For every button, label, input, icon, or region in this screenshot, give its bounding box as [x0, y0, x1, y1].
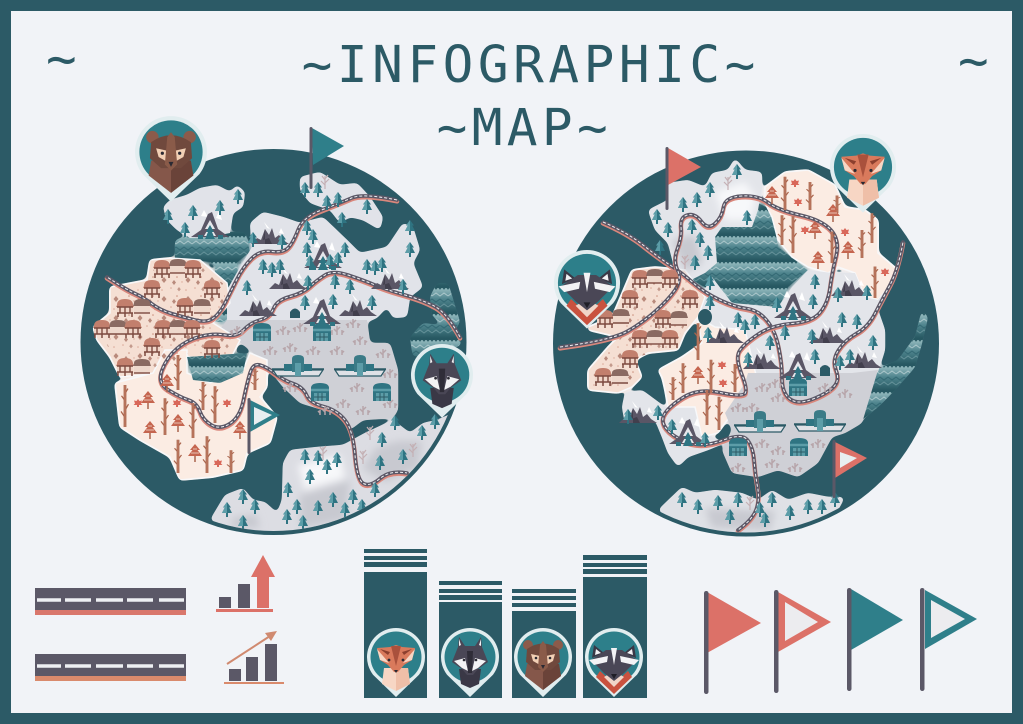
bar chart: [364, 549, 647, 698]
panel: left map: [80, 116, 473, 540]
flag legend: teal solid: [847, 588, 903, 691]
road ribbons right: [560, 196, 903, 531]
growth chart with big arrow: [216, 555, 275, 612]
village speckle: [104, 268, 231, 368]
pine trees left: [163, 175, 440, 530]
road sample 2: [35, 654, 186, 681]
flag on left map: teal outline: [248, 398, 280, 454]
pin: fox: [830, 134, 896, 213]
title line 2: ~MAP~: [437, 99, 612, 158]
wooden houses left: [93, 259, 221, 376]
road ribbons left: [107, 196, 460, 486]
snowy village huts right: [729, 378, 852, 472]
corner tilde left: ~: [46, 30, 77, 89]
flag legend: coral solid: [704, 591, 761, 694]
road sample 1: [35, 588, 186, 615]
title line 1: ~INFOGRAPHIC~: [302, 36, 760, 95]
flag on right map: coral: [666, 147, 701, 210]
right map disc: [553, 150, 939, 536]
autumn forest right: [669, 177, 890, 430]
growth chart with trend line: [224, 631, 284, 684]
bar: raccoon: [583, 555, 647, 698]
mountains right: [619, 274, 882, 446]
flag on left map: teal: [310, 127, 344, 189]
bar: wolf: [439, 581, 502, 698]
title: [46, 30, 989, 158]
pin: raccoon: [554, 250, 620, 329]
panel: right map: [553, 134, 939, 545]
flag legend: teal outline: [920, 588, 977, 691]
bar: fox: [364, 549, 427, 698]
village speckle: [593, 281, 691, 386]
wooden houses right: [594, 269, 699, 386]
pin: bear: [135, 116, 207, 202]
mountains left: [191, 210, 409, 326]
flag legend: coral outline: [774, 590, 831, 693]
water hole: [698, 309, 712, 325]
pine trees right: [623, 164, 878, 527]
snowy village huts left: [230, 319, 397, 415]
autumn forest left: [121, 355, 258, 473]
corner tilde right: ~: [958, 32, 989, 91]
left map terrain: [93, 172, 462, 540]
flag on right map: coral outline: [832, 440, 867, 498]
right map terrain: [560, 158, 928, 545]
soft snow patches left: [232, 441, 422, 528]
pin: wolf: [411, 344, 473, 418]
left map disc: [80, 149, 466, 535]
bar: bear: [512, 589, 576, 698]
soft snow patches right: [672, 182, 775, 530]
